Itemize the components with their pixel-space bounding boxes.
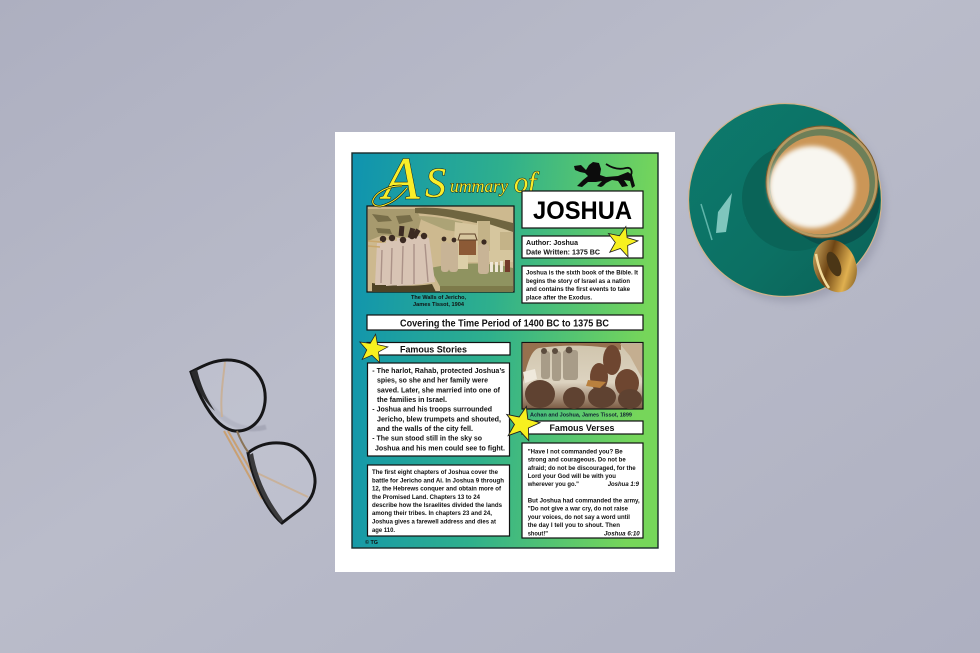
heading: Famous Verses [522,421,643,434]
title: A Summary of [373,146,539,212]
text box: famous verses [522,443,643,538]
text box: famous verses: strong and courageous. Do not be [528,456,626,464]
text box: famous stories list: Jericho, blew trumpets and shouted, [377,414,501,423]
text box: famous stories list: - The harlot, Rahab, protected Joshua’s [372,366,505,375]
info box: author and date: Author: Joshua [526,238,579,247]
info box: author and date: Date Written: 1375 BC [526,248,601,256]
heading: Famous Stories: Famous Stories [400,344,467,356]
text box: book overview: The first eight chapters of Joshua cover the [372,469,498,476]
painting: Achan and Joshua [522,342,643,409]
text box: famous verses: your voices, do not say a word until [528,514,630,521]
text box: famous stories list: spies, so she and her family were [377,376,488,385]
standing priests [541,350,578,381]
text box: famous stories list: - Joshua and his troops surrounded [372,405,492,414]
text box: book overview: 12, the Hebrews conquer and obtain more of [372,486,502,492]
heading: Famous Stories [367,342,510,356]
caption: Achan and Joshua: Achan and Joshua, James Tissot, 1899 [530,413,632,419]
title text: S [425,161,446,207]
title box: JOSHUA [522,191,643,228]
text box: famous verses: shout!" [528,530,548,538]
coffee cup on teal saucer [688,104,885,302]
icon: black heraldic lion [574,162,635,188]
text box: famous verses: But Joshua had commanded the army, [528,498,640,504]
heading: Famous Verses: Famous Verses [550,423,614,434]
gold temples [221,362,308,499]
handle [805,233,865,299]
text box: book description: Joshua is the sixth book of the Bible. It [526,270,639,276]
caption: The Walls of Jericho [411,295,466,308]
cup rim [766,126,878,238]
icon: yellow star by Famous Verses [502,402,543,442]
title box: JOSHUA: JOSHUA [533,197,632,225]
milk foam [769,146,855,228]
text box: book description: begins the story of Israel as a nation [526,278,630,285]
banner: time period: Covering the Time Period of 1400 BC to 1375 BC [400,318,609,330]
bridge [237,431,248,452]
icon: yellow star by author box [604,223,641,258]
text box: famous stories list: and the walls of the city fell. [377,424,473,433]
text box: famous stories list: - The sun stood still in the sky so [372,434,482,443]
green ground [433,264,513,286]
group of trumpeters [375,236,435,286]
saucer highlights [701,174,760,240]
text box: book overview: Joshua gives a farewell address and dies at [372,518,497,526]
banner: time period [367,315,643,330]
caption: The Walls of Jericho: James Tissot, 1904 [413,302,465,308]
text box: famous verses: "Do not give a war cry, do not raise [528,506,628,512]
text box: book description: and contains the first events to take [526,286,630,293]
coffee surface [770,136,870,234]
text box: book description [522,266,643,303]
text box: book overview: age 110. [372,527,395,534]
text box: famous verses: the day I tell you to shout. Then [528,522,620,529]
text box: book overview: among their tribes. In chapters 23 and 24, [372,510,492,517]
saucer [688,104,882,296]
painting: The Walls of Jericho [367,206,514,292]
eyeglasses [191,360,315,523]
lower lens [248,443,315,523]
text box: book overview: the Promised Land. Chapters 13 to 24 [372,494,480,501]
cup body [742,145,848,251]
copyright mark: © TG [365,539,378,546]
text box: famous verses: afraid; do not be discouraged, for the [528,465,636,472]
text box: famous stories list: the families in Israel. [377,395,447,404]
text box: famous stories list [368,363,510,456]
upper-left olive scrub [368,209,421,241]
title text: of [514,166,539,199]
caption: The Walls of Jericho: The Walls of Jericho, [411,295,466,301]
poster panel with gradient [352,153,658,548]
city walls [453,221,513,262]
text box: famous verses: "Have I not commanded you? Be [528,448,623,456]
text box: famous verses: wherever you go." [527,481,579,488]
text box: book description: place after the Exodus. [526,294,592,302]
text box: famous stories list: Joshua and his men could see to fight. [375,443,505,452]
upper lens [191,360,265,431]
icon: yellow star by Famous Stories [357,332,390,363]
text box: famous stories list: saved. Later, she married into one of [377,385,500,394]
text box: famous verses: Lord your God will be with you [528,473,616,480]
text box: famous verses: Joshua 6:10 [604,530,640,538]
title text: ummary [450,176,508,196]
title text: A [379,146,420,212]
text box: book overview [368,465,510,536]
dark hill band [415,208,513,233]
arch and top band [523,343,621,382]
white poster sheet [335,132,675,572]
priests and ark [441,242,489,274]
text box: famous verses: Joshua 1:9 [608,481,639,488]
text box: book overview: battle for Jericho and Ai. In Joshua 9 through [372,478,504,484]
text box: book overview: describe how the Israelites divided the lands [372,502,502,509]
distant procession [490,261,503,272]
info box: author and date [522,236,643,258]
dark right-hand figures [590,345,639,397]
kneeling figures along bottom [525,380,642,409]
